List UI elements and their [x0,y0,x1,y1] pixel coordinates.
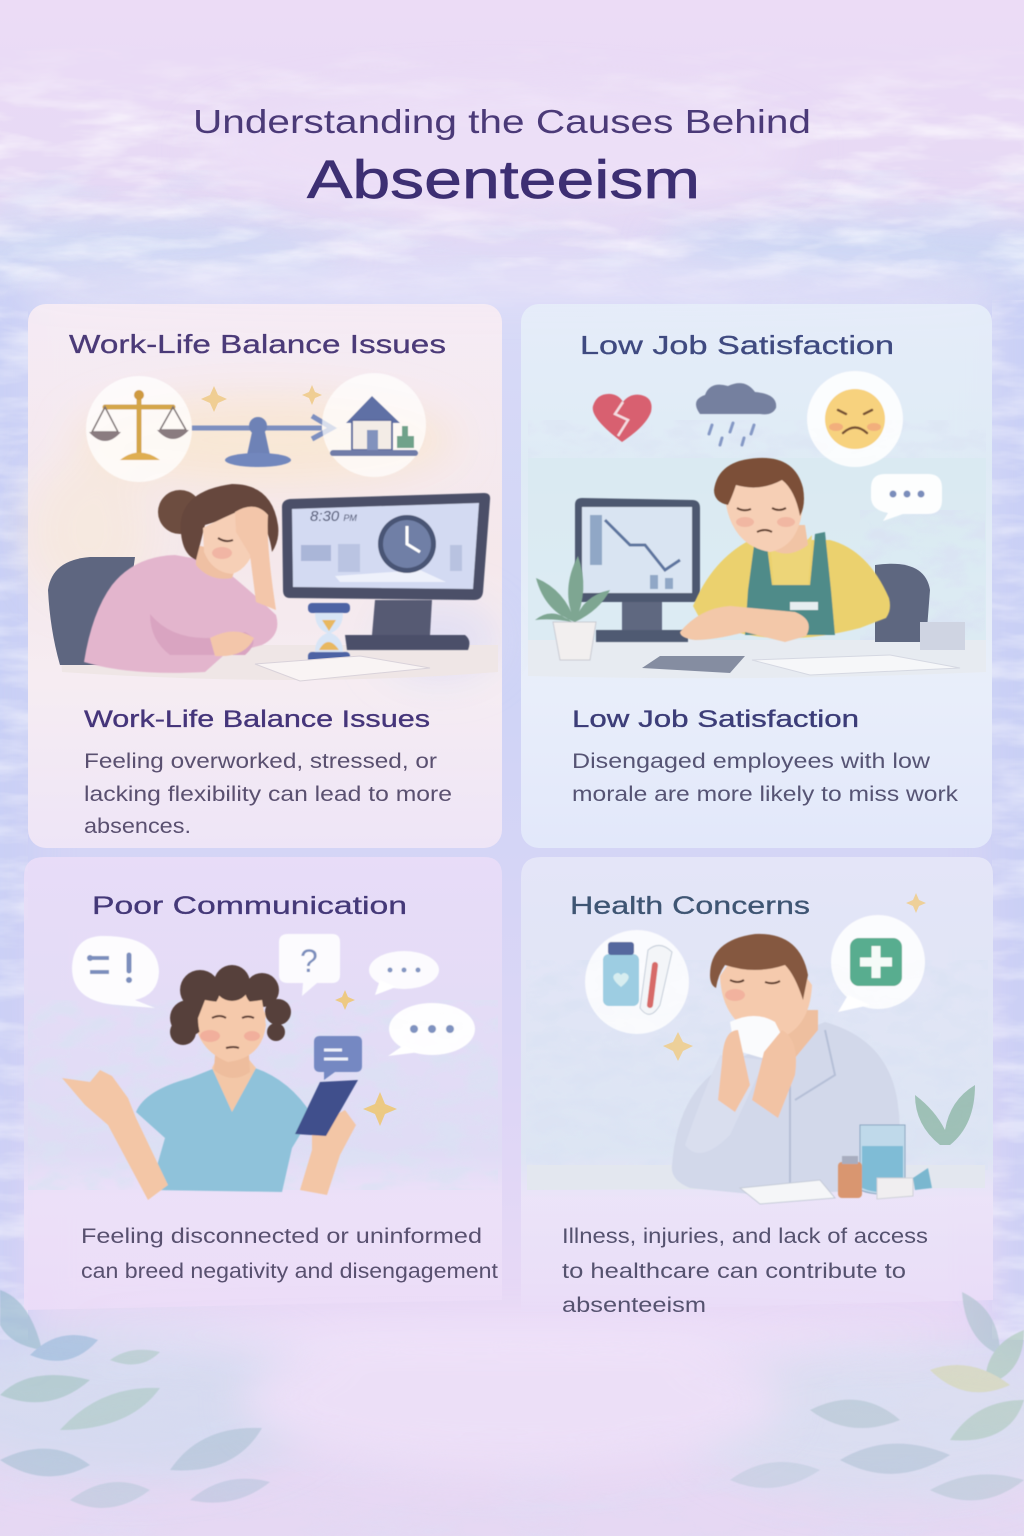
panel 2 body text: Disengaged employees with low [572,750,931,773]
desk [528,640,986,678]
woman with phone [62,965,358,1200]
star [335,990,397,1126]
panel 1 heading: Work-Life Balance Issues [69,329,446,359]
clock readout: 8:30 PM [310,508,357,525]
panel 1 body text: lacking flexibility can lead to more [84,783,452,806]
foliage: bottom left [0,1290,270,1508]
hourglass [308,603,350,663]
panel 1 body text: Feeling overworked, stressed, or [84,750,437,773]
question mark: ? [300,943,318,979]
icon: speech bubble [871,474,942,521]
title line 1: Understanding the Causes Behind [193,103,811,140]
icon: medical cross bubble [831,915,925,1012]
star [663,893,926,1061]
desk [527,1165,985,1190]
panel 4 body text: Illness, injuries, and lack of access [562,1225,928,1248]
monitor with falling chart [575,498,700,642]
icon: balance scale [86,376,192,482]
desk [60,645,498,680]
medicine items [740,1125,932,1204]
panel 2 card [521,304,992,848]
panel 4 heading: Health Concerns [570,892,810,920]
title [193,103,811,210]
panel 3 card [24,857,502,1310]
panel 2 body text: morale are more likely to miss work [572,783,959,806]
decorative stars [201,385,322,412]
panel: work-life balance issues [28,304,502,848]
title line 2: Absenteeism [307,150,700,210]
panel 1 subheading: Work-Life Balance Issues [84,706,430,733]
icon: medicine and thermometer [585,930,689,1034]
icon: message notification [314,1036,362,1080]
books [920,622,965,650]
icon: chat bubble large [388,1003,475,1056]
papers [255,656,430,681]
panel: low job satisfaction [521,304,992,848]
panel 1 warm wash [30,395,500,680]
foliage: bottom right [730,1292,1024,1500]
man sneezing [672,934,900,1195]
panel 3 body text [81,1225,498,1283]
chair [48,557,135,665]
panel 3 heading: Poor Communication [92,892,407,920]
panel 1 body text: absences. [84,815,191,838]
panel: poor communication [24,857,502,1310]
icon: sad face [807,371,903,467]
panel: health concerns [521,857,993,1317]
icon: question bubble [279,934,340,996]
panel 1 body text [84,750,452,838]
panel 2 body text [572,750,959,806]
icon: rain cloud [696,383,776,445]
plant [915,1085,975,1145]
panel 4 body text: to healthcare can contribute to [562,1260,906,1283]
panel 1 card [28,304,502,848]
panel 4 scenery [526,960,988,1170]
potted plant [535,556,610,660]
icon: house [322,373,426,477]
panel 3 body text: can breed negativity and disengagement [81,1260,498,1283]
panel 3 body text: Feeling disconnected or uninformed [81,1225,482,1248]
icon: chat bubble small [369,951,439,995]
icon: exclamation bubble [72,936,159,1008]
panel 2 heading: Low Job Satisfaction [580,330,894,360]
panel 4 card [521,857,993,1312]
icon: seesaw arrow [192,416,332,467]
desk items [642,656,745,673]
chair [875,564,930,642]
man in apron [680,458,890,642]
panel 4 body text [562,1225,928,1317]
panel 3 scenery [28,1000,498,1190]
monitor [282,493,490,650]
icon: broken heart [593,394,652,442]
panel 4 body text: absenteeism [562,1294,706,1317]
panel 2 scenery [528,511,986,640]
woman at desk [84,484,278,673]
panel 2 subheading: Low Job Satisfaction [572,706,859,733]
